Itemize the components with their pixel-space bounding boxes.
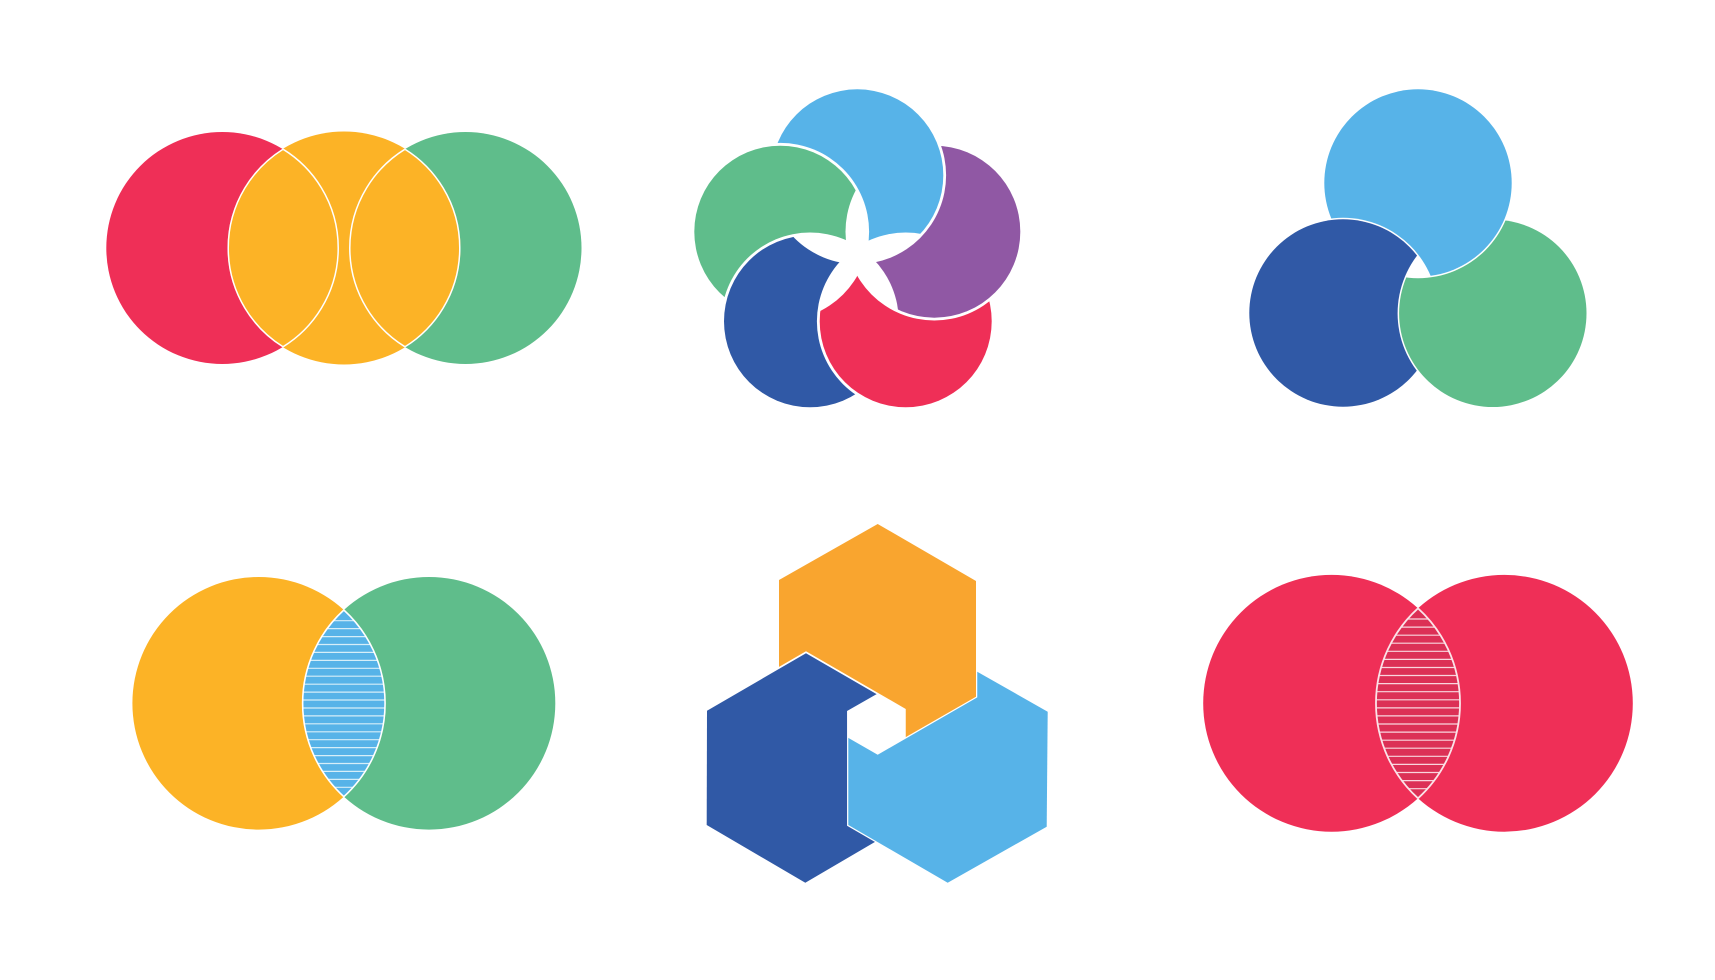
white overlap outlines: [228, 149, 460, 347]
green circle: [350, 132, 582, 364]
panel: two circles with blue hatched overlap: [132, 577, 555, 830]
panel: five interlocking circles: [694, 89, 1020, 407]
left red circle: [1203, 575, 1460, 832]
dark blue hexagon: [706, 653, 877, 883]
orange centre circle: [228, 132, 460, 364]
purple segment: [876, 146, 1020, 318]
right red circle: [1376, 575, 1633, 832]
light blue circle: [1324, 89, 1512, 277]
dark blue circle: [1249, 219, 1417, 407]
red circle: [106, 132, 338, 364]
dark blue segment: [724, 237, 856, 408]
panel: three interlocking circles: [1249, 89, 1587, 407]
hatched red overlap: [1370, 608, 1465, 798]
panel: three interlocking hexagons: [707, 524, 1048, 883]
green circle: [303, 577, 555, 830]
hatched blue overlap: [300, 610, 390, 797]
panel: three overlapping circles in a row: [106, 132, 582, 364]
light blue segment: [778, 89, 944, 241]
green circle: [1399, 220, 1587, 407]
red segment: [820, 276, 992, 408]
green segment: [694, 146, 856, 298]
light blue hexagon: [848, 655, 1048, 883]
orange circle: [132, 577, 385, 830]
panel: two red circles with hatched overlap: [1203, 575, 1633, 832]
orange hexagon: [779, 524, 976, 753]
